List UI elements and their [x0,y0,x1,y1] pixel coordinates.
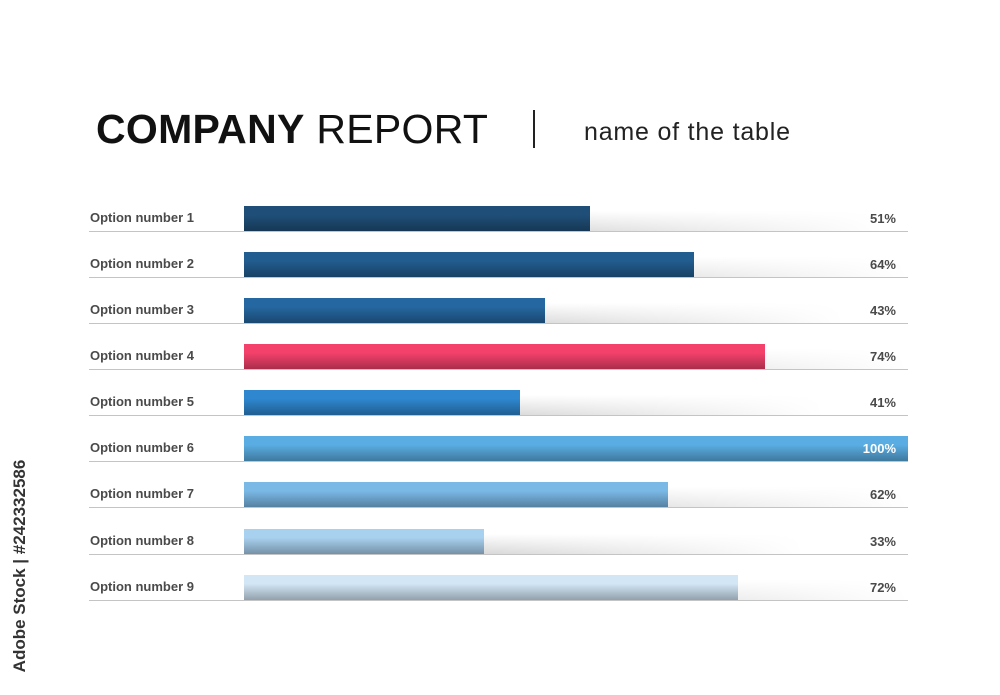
row 6 [89,436,908,462]
row 4 [89,344,908,370]
row 5: 41% [870,395,896,410]
title divider [533,110,535,148]
row 3 [89,298,908,324]
side credit text: Adobe Stock | #242332586 [10,460,29,672]
subtitle: name of the table [584,118,791,146]
row 6: 100% [863,441,896,456]
row 5 [89,390,908,416]
row 2: Option number 2 [90,256,194,271]
row 3: Option number 3 [90,302,194,317]
row 8: 33% [870,534,896,549]
row 1: Option number 1 [90,210,194,225]
row 7: Option number 7 [90,486,194,501]
row 2 [89,252,908,278]
row 7: 62% [870,487,896,502]
row 3: 43% [870,303,896,318]
row 6: Option number 6 [90,440,194,455]
row 4: Option number 4 [90,348,194,363]
row 8: Option number 8 [90,533,194,548]
row 8 [89,529,908,555]
row 9 [89,575,908,601]
row 1 [89,206,908,232]
row 5: Option number 5 [90,394,194,409]
row 2: 64% [870,257,896,272]
row 1: 51% [870,211,896,226]
row 7 [89,482,908,508]
row 9: Option number 9 [90,579,194,594]
title: COMPANY REPORT [96,106,488,152]
row 4: 74% [870,349,896,364]
row 9: 72% [870,580,896,595]
